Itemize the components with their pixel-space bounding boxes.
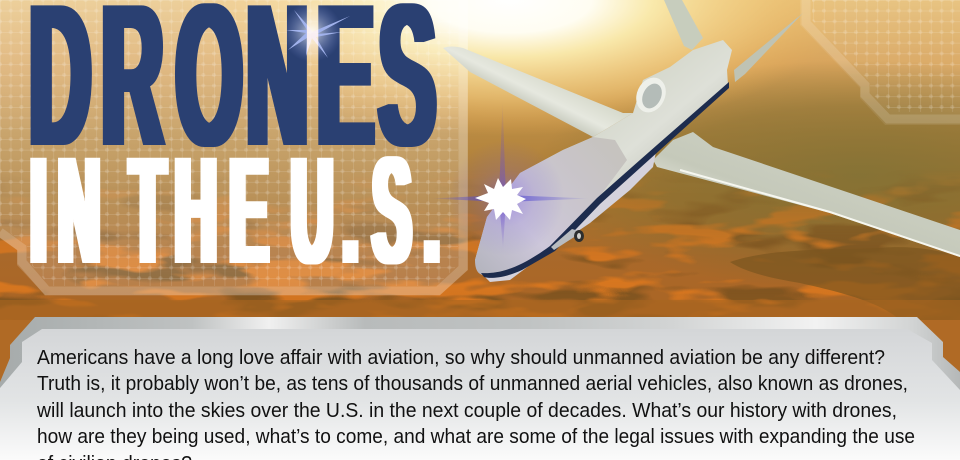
illustration: drone aircraft <box>443 0 960 282</box>
panel: title HUD frame <box>0 0 468 295</box>
dark fuselage stripe <box>481 82 729 278</box>
icon: lens flare on title <box>282 2 350 62</box>
tail fin left <box>664 0 703 50</box>
intro paragraph <box>36 346 915 460</box>
intro paragraph: Americans have a long love affair with aviation, so why should unmanned aviation be any different? <box>37 346 885 369</box>
tail fin right <box>734 13 803 82</box>
panel: top right HUD frame <box>800 0 960 125</box>
fuselage underside <box>483 147 657 282</box>
background: sunset desert sky and terrain <box>0 0 960 320</box>
panel: intro text <box>0 317 960 460</box>
intro paragraph: will launch into the skies over the U.S. in the next couple of decades. What’s our history with drones, <box>36 399 897 422</box>
intro paragraph: how are they being used, what’s to come, and what are some of the legal issues with expanding the use <box>37 425 915 448</box>
intro paragraph: Truth is, it probably won’t be, as tens of thousands of unmanned aerial vehicles, also known as drones, <box>37 372 908 395</box>
icon: flare on drone nose <box>430 100 590 256</box>
landing gear <box>551 229 584 250</box>
title: IN THE U.S.: IN THE U.S. <box>30 124 440 296</box>
wing right <box>653 132 960 257</box>
nose cone <box>475 137 627 275</box>
wing left <box>443 46 633 137</box>
fuselage <box>475 40 732 275</box>
engine intake <box>631 73 671 117</box>
